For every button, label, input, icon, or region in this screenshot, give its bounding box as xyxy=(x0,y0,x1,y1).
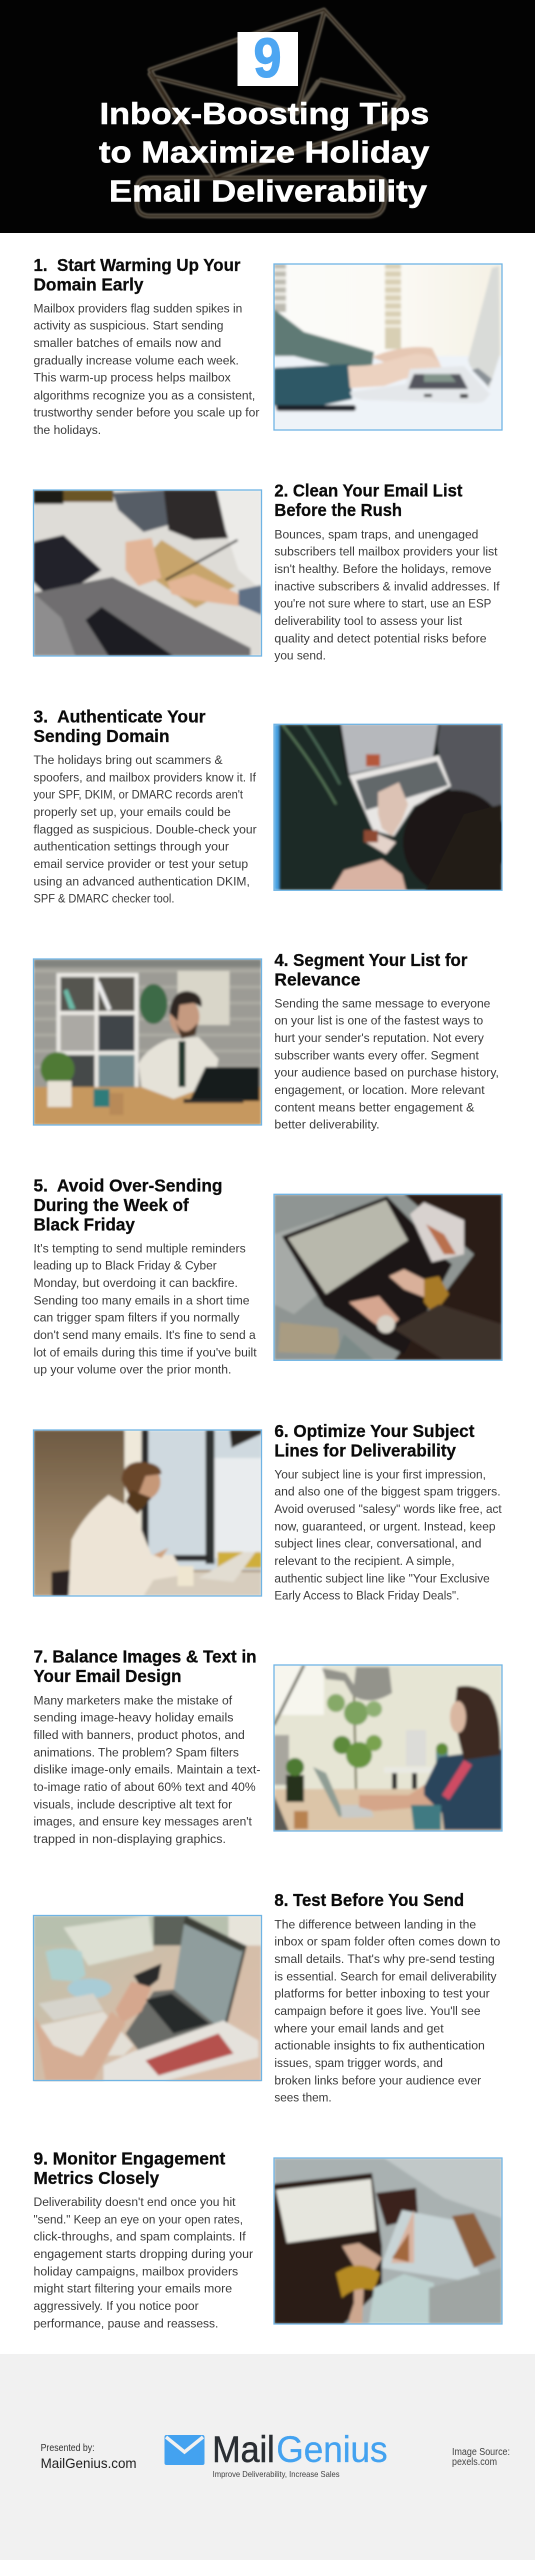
body text: your SPF, DKIM, or DMARC records aren't xyxy=(34,788,244,802)
body text: The holidays bring out scammers & xyxy=(34,753,222,767)
heading xyxy=(34,255,241,294)
heading: Lines for Deliverability xyxy=(274,1440,456,1460)
body text: better deliverability. xyxy=(274,1118,380,1132)
body text: subscribers tell mailbox providers your list xyxy=(274,545,498,559)
image source credit xyxy=(452,2447,510,2468)
body text: and also one of the biggest spam triggers. xyxy=(274,1485,501,1499)
body text: SPF & DMARC checker tool. xyxy=(34,892,174,906)
body text: visuals, include descriptive alt text for xyxy=(34,1797,232,1811)
presented by credit: Presented by: xyxy=(41,2443,95,2454)
heading: Relevance xyxy=(274,969,361,989)
body text: small details. That's why pre-send testing xyxy=(274,1952,495,1966)
heading: Your Email Design xyxy=(34,1666,182,1686)
body text: using an advanced authentication DKIM, xyxy=(34,874,250,888)
photo: hands writing over a laptop xyxy=(34,490,262,656)
body text xyxy=(34,1241,257,1377)
body text: authentication settings through your xyxy=(34,840,229,854)
body text: inbox or spam folder often comes down to xyxy=(274,1935,501,1949)
body text: "send." Keep an eye on your open rates, xyxy=(34,2212,243,2226)
tip 1 panel xyxy=(34,255,502,437)
body text: Monday, but overdoing it can backfire. xyxy=(34,1276,238,1290)
photo: laptop and notebook on bed xyxy=(274,2158,502,2324)
image source credit: pexels.com xyxy=(452,2457,497,2468)
body text: content means better engagement & xyxy=(274,1100,474,1114)
body text: don't send many emails. It's fine to send a xyxy=(34,1328,256,1342)
body text: Avoid overused "salesy" words like free, act xyxy=(274,1502,502,1516)
image source credit: Image Source: xyxy=(452,2447,510,2458)
body text: dislike image-only emails. Maintain a text- xyxy=(34,1763,260,1777)
number badge: 9 xyxy=(254,26,282,89)
body text: quality and detect potential risks before xyxy=(274,631,487,645)
heading: 1. Start Warming Up Your xyxy=(34,255,241,275)
body text: email service provider or test your setup xyxy=(34,857,248,871)
icon: envelope xyxy=(164,2435,204,2465)
heading: 8. Test Before You Send xyxy=(274,1890,464,1910)
body text: where your email lands and get xyxy=(273,2021,444,2035)
body text: Sending the same message to everyone xyxy=(274,996,491,1010)
title: Inbox-Boosting Tips xyxy=(100,97,429,131)
heading xyxy=(34,707,206,746)
body text xyxy=(274,996,499,1132)
title: to Maximize Holiday xyxy=(99,136,429,170)
tip 2 panel xyxy=(34,481,500,663)
wordmark xyxy=(212,2429,388,2470)
heading: Domain Early xyxy=(34,274,144,294)
body text: hurt your sender's reputation. Not every xyxy=(274,1031,485,1045)
body text: authentic subject line like "Your Exclusive xyxy=(274,1571,490,1585)
body text xyxy=(34,753,257,906)
body text: your audience based on purchase history, xyxy=(274,1066,499,1080)
body text xyxy=(34,1693,260,1846)
body text: on your list is one of the fastest ways to xyxy=(274,1014,483,1028)
wordmark: Mail xyxy=(212,2429,275,2470)
title: Email Deliverability xyxy=(109,174,427,208)
body text: relevant to the recipient. A simple, xyxy=(274,1554,455,1568)
title xyxy=(99,97,429,208)
tip 4 panel xyxy=(34,950,499,1132)
body text: engagement starts dropping during your xyxy=(34,2247,253,2261)
body text: issues, spam trigger words, and xyxy=(274,2056,443,2070)
heading: 7. Balance Images & Text in xyxy=(34,1647,257,1667)
body text: the holidays. xyxy=(34,423,101,437)
heading: 3. Authenticate Your xyxy=(34,707,206,727)
body text: to-image ratio of about 60% text and 40% xyxy=(34,1780,256,1794)
body text: Sending too many emails in a short time xyxy=(34,1293,250,1307)
body text: properly set up, your emails could be xyxy=(34,805,231,819)
tip 5 panel xyxy=(34,1176,502,1377)
photo: man at desk with laptop xyxy=(34,959,262,1125)
body text: gradually increase volume each week. xyxy=(34,353,239,367)
heading: 2. Clean Your Email List xyxy=(274,481,463,501)
heading: During the Week of xyxy=(34,1195,189,1215)
photo: woman working at a laptop xyxy=(274,1665,502,1831)
wordmark: Genius xyxy=(276,2429,388,2470)
body text xyxy=(34,2195,253,2330)
body text: filled with banners, product photos, and xyxy=(34,1728,245,1742)
heading xyxy=(34,2149,225,2188)
tip 6 panel xyxy=(34,1421,502,1603)
logo xyxy=(164,2429,388,2479)
heading: 9. Monitor Engagement xyxy=(34,2149,225,2169)
body text: animations. The problem? Spam filters xyxy=(34,1745,239,1759)
body text: trustworthy sender before you scale up for xyxy=(34,406,259,420)
body text xyxy=(274,527,500,663)
body text: actionable insights to fix authentication xyxy=(274,2039,485,2053)
tip 7 panel xyxy=(34,1647,502,1846)
body text: It's tempting to send multiple reminders xyxy=(34,1241,246,1255)
body text: can trigger spam filters if you normally xyxy=(34,1311,240,1325)
body text: lot of emails during this time if you've built xyxy=(34,1345,257,1359)
body text: engagement, or location. More relevant xyxy=(274,1083,485,1097)
tip 3 panel xyxy=(34,707,507,906)
body text: aggressively. If you notice poor xyxy=(34,2299,199,2313)
body text: broken links before your audience ever xyxy=(274,2073,481,2087)
body text: flagged as suspicious. Double-check your xyxy=(34,822,257,836)
body text: activity as suspicious. Start sending xyxy=(34,319,224,333)
body text: isn't healthy. Before the holidays, remove xyxy=(274,562,492,576)
body text: you send. xyxy=(274,649,326,663)
body text: Deliverability doesn't end once you hit xyxy=(34,2195,236,2209)
heading: Before the Rush xyxy=(274,500,402,520)
footer xyxy=(0,2354,535,2560)
heading: 5. Avoid Over-Sending xyxy=(34,1176,222,1196)
heading xyxy=(34,1176,222,1234)
body text: subject lines clear, conversational, and xyxy=(274,1537,482,1551)
body text: smaller batches of emails now and xyxy=(34,336,221,350)
body text: campaign before it goes live. You'll see xyxy=(274,2004,481,2018)
heading xyxy=(274,481,463,520)
body text xyxy=(34,301,259,437)
body text: might start filtering your emails more xyxy=(34,2282,232,2296)
body text: images, and ensure key messages aren't xyxy=(34,1815,252,1829)
body text: algorithms recognize you as a consistent, xyxy=(34,388,255,402)
body text: inactive subscribers & invalid addresses. If xyxy=(274,579,500,593)
photo: overhead laptop on dark desk xyxy=(274,724,507,894)
body text: now, guaranteed, or urgent. Instead, keep xyxy=(274,1519,496,1533)
body text: up your volume over the prior month. xyxy=(34,1363,231,1377)
body text: holiday campaigns, mailbox providers xyxy=(34,2264,238,2278)
body text: Your subject line is your first impression, xyxy=(274,1467,486,1481)
tip 9 panel xyxy=(34,2149,502,2330)
body text: sending image-heavy holiday emails xyxy=(34,1711,233,1725)
body text: spoofers, and mailbox providers know it. If xyxy=(34,770,257,784)
body text: Many marketers make the mistake of xyxy=(34,1693,233,1707)
photo: hands on dark laptop on a blanket xyxy=(274,1194,502,1360)
body text: subscriber wants every offer. Segment xyxy=(274,1048,479,1062)
heading: Sending Domain xyxy=(34,726,170,746)
heading: 4. Segment Your List for xyxy=(274,950,468,970)
heading xyxy=(274,1421,475,1460)
body text xyxy=(274,1467,502,1603)
icon: neon envelope outline xyxy=(137,10,403,216)
photo: typing on a white laptop xyxy=(274,264,502,430)
presented by credit: MailGenius.com xyxy=(41,2455,137,2471)
body text: click-throughs, and spam complaints. If xyxy=(34,2230,246,2244)
body text: you're not sure where to start, use an ESP xyxy=(274,597,491,611)
tip 8 panel xyxy=(34,1890,501,2105)
tagline: Improve Deliverability, Increase Sales xyxy=(213,2469,340,2479)
photo: hand holding a phone beside laptop xyxy=(34,1916,262,2082)
presented by credit xyxy=(41,2443,137,2471)
heading: Black Friday xyxy=(34,1214,135,1234)
body text: Early Access to Black Friday Deals". xyxy=(274,1589,459,1603)
body text: sees them. xyxy=(274,2091,332,2105)
heading: Metrics Closely xyxy=(34,2168,159,2188)
body text: platforms for better inboxing to test your xyxy=(274,1987,490,2001)
body text: is essential. Search for email deliverability xyxy=(274,1969,497,1983)
body text: This warm-up process helps mailbox xyxy=(34,371,231,385)
heading xyxy=(274,950,468,989)
photo: man with phone beside a window xyxy=(34,1430,262,1596)
body text: The difference between landing in the xyxy=(274,1917,476,1931)
body text: leading up to Black Friday & Cyber xyxy=(34,1259,217,1273)
body text: Mailbox providers flag sudden spikes in xyxy=(34,301,242,315)
body text: deliverability tool to assess your list xyxy=(274,614,463,628)
body text: trapped in non-displaying graphics. xyxy=(34,1832,226,1846)
number badge xyxy=(238,26,298,89)
body text: performance, pause and reassess. xyxy=(34,2316,218,2330)
body text xyxy=(273,1917,501,2105)
heading: 6. Optimize Your Subject xyxy=(274,1421,475,1441)
header banner xyxy=(0,0,535,233)
body text: Bounces, spam traps, and unengaged xyxy=(274,527,478,541)
heading xyxy=(34,1647,257,1686)
